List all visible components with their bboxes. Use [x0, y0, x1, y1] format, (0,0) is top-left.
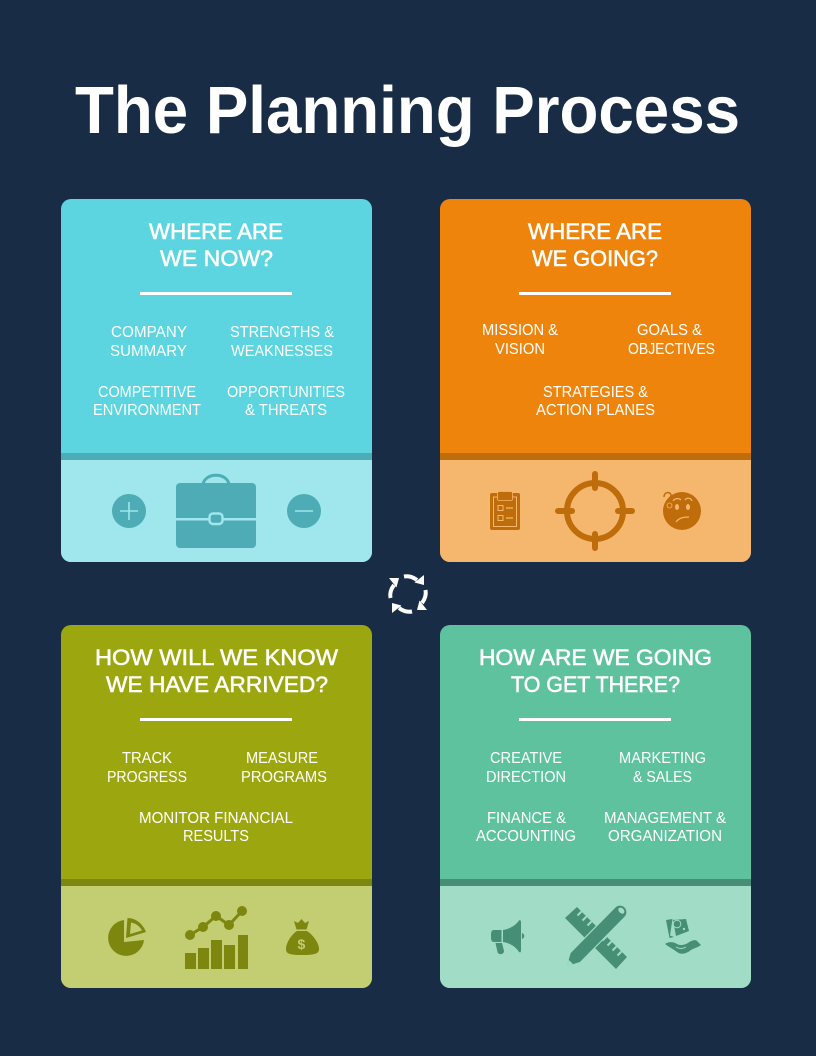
text block: execution topics: FINANCE & — [487, 810, 567, 827]
text block: measurement topics — [107, 750, 327, 845]
text block: current state topics: WEAKNESSES — [231, 343, 333, 360]
heading: where are we going: WHERE ARE — [528, 219, 662, 244]
heading: how are we going: HOW ARE WE GOING — [479, 645, 712, 670]
text block: measurement topics: RESULTS — [183, 828, 249, 845]
text block: current state topics: OPPORTUNITIES — [227, 384, 345, 401]
text block: current state topics: & THREATS — [245, 402, 327, 419]
text block: measurement topics: PROGRESS — [107, 769, 187, 786]
text block: current state topics: COMPETITIVE — [98, 384, 196, 401]
text block: direction topics: STRATEGIES & — [543, 384, 649, 401]
text block: measurement topics: MONITOR FINANCIAL — [139, 810, 293, 827]
icon: pencil and ruler — [561, 902, 630, 972]
icon: clipboard — [490, 492, 520, 530]
heading: how will we know: WE HAVE ARRIVED? — [106, 672, 328, 697]
text block: direction topics: OBJECTIVES — [628, 341, 715, 358]
heading: where are we now: WHERE ARE — [149, 219, 283, 244]
heading: where are we going — [528, 219, 662, 271]
heading: how are we going — [479, 645, 712, 697]
heading: where are we now: WE NOW? — [160, 246, 273, 271]
text block: execution topics: ORGANIZATION — [608, 828, 722, 845]
text block: measurement topics: MEASURE — [246, 750, 318, 767]
icon: briefcase — [176, 475, 256, 548]
icon: growth chart — [185, 906, 248, 969]
text block: direction topics: VISION — [495, 341, 545, 358]
text block: measurement topics: PROGRAMS — [241, 769, 327, 786]
icon: minus — [287, 494, 321, 528]
text block: measurement topics: TRACK — [122, 750, 173, 767]
text block: execution topics — [476, 750, 727, 845]
icon: confused face — [663, 492, 701, 530]
text block: current state topics: ENVIRONMENT — [93, 402, 201, 419]
icon: money bag — [286, 919, 319, 955]
icon: money bag: $ — [298, 936, 306, 952]
icon: pie chart — [108, 918, 146, 956]
heading: how will we know — [95, 645, 339, 697]
title: The Planning Process — [75, 73, 740, 148]
heading: where are we now — [149, 219, 283, 271]
text block: direction topics — [482, 322, 715, 419]
text block: execution topics: MARKETING — [619, 750, 706, 767]
panel: where are we now — [61, 199, 372, 562]
text block: execution topics: MANAGEMENT & — [604, 810, 727, 827]
text block: current state topics: SUMMARY — [110, 343, 187, 360]
text block: current state topics: COMPANY — [111, 324, 187, 341]
panel: how are we going to get there — [440, 625, 751, 988]
icon: megaphone — [491, 920, 524, 954]
text block: current state topics — [93, 324, 345, 419]
heading: how are we going: TO GET THERE? — [511, 672, 680, 697]
text block: execution topics: CREATIVE — [490, 750, 562, 767]
icon: plus — [112, 494, 146, 528]
icon: target — [558, 474, 632, 548]
text block: direction topics: GOALS & — [637, 322, 703, 339]
text block: current state topics: STRENGTHS & — [230, 324, 335, 341]
text block: execution topics: DIRECTION — [486, 769, 566, 786]
text block: execution topics: ACCOUNTING — [476, 828, 576, 845]
panel: how will we know — [61, 625, 372, 988]
text block: direction topics: MISSION & — [482, 322, 559, 339]
panel: where are we going — [440, 199, 751, 562]
text block: execution topics: & SALES — [633, 769, 692, 786]
text block: direction topics: ACTION PLANES — [536, 402, 655, 419]
heading: how will we know: HOW WILL WE KNOW — [95, 645, 339, 670]
icon: cycle arrows — [389, 575, 427, 613]
heading: where are we going: WE GOING? — [532, 246, 658, 271]
icon: hand with money — [665, 919, 701, 954]
